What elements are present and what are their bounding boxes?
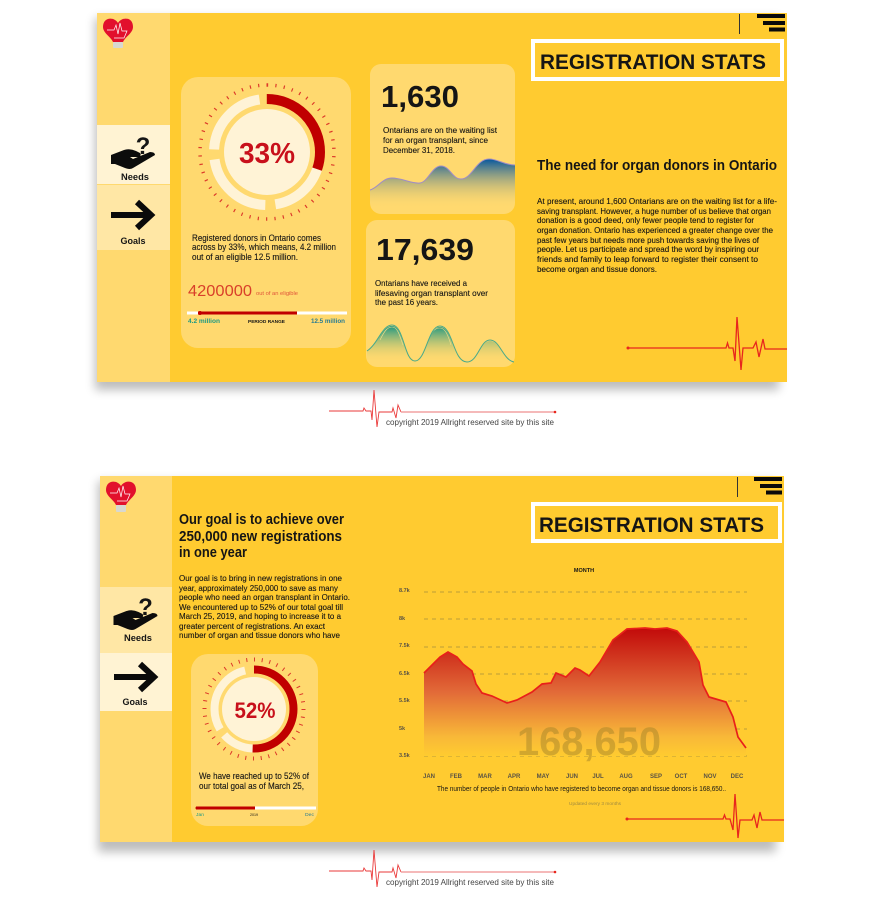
text: donors description: out of an eligible 12.5 million.	[192, 252, 298, 262]
chart: waiting list area	[370, 159, 515, 212]
text: waiting list: Ontarians are on the waiting list	[383, 125, 498, 135]
nav: needs: Needs	[124, 633, 152, 644]
text: goal paragraph: March 25, 2019, and hoping to increase it to a	[179, 611, 341, 621]
text: need paragraph: people. Let us participate and spread the word by inspiring our	[537, 244, 759, 254]
figure: 4200000	[188, 283, 298, 300]
range slider: Dec	[305, 812, 315, 817]
text: transplants	[375, 278, 488, 307]
range slider: Jan	[196, 812, 205, 817]
text: need paragraph: donation is a good deed, only fewer people tend to register for	[537, 215, 754, 225]
text: transplants: lifesaving organ transplant over	[375, 288, 488, 298]
text: goal paragraph: number of organ and tissue donors who have	[179, 630, 340, 640]
panel: needs	[95, 13, 787, 390]
month labels: JUN	[566, 774, 578, 780]
panel: transplants card: 17,639	[376, 232, 474, 267]
month labels: MAY	[537, 774, 549, 780]
text: waiting list: for an organ transplant, since	[383, 135, 488, 145]
heartbeat line	[626, 317, 787, 370]
panel: transplants card	[366, 220, 515, 367]
total: 168,650: 168,650	[517, 720, 661, 764]
nav: goals: Goals	[122, 697, 148, 708]
text: goal paragraph: year, approximately 250,000 to save as many	[179, 583, 339, 593]
area chart: monthly registrations: MONTH	[574, 568, 594, 574]
area	[424, 628, 746, 756]
y axis labels and grid	[399, 588, 747, 759]
gauge: 33%: 33%	[239, 138, 295, 170]
gauge: 33%	[200, 85, 334, 219]
range slider: 4.2 million	[188, 318, 220, 325]
text: reached: We have reached up to 52% of	[199, 771, 309, 781]
logo: heart bulb	[103, 19, 133, 48]
logo: heart bulb	[106, 482, 136, 512]
nav: goals	[97, 185, 170, 250]
text: goal paragraph: greater percent of registrations. An exact	[179, 621, 326, 631]
text: reached	[199, 771, 309, 791]
title box: REGISTRATION STATS	[540, 51, 766, 74]
text: need paragraph: friends and family to leap forward to register their consent to	[537, 254, 758, 264]
y axis labels and grid: 6.5k	[399, 671, 411, 677]
text: need paragraph	[537, 196, 777, 274]
text: need paragraph: organ donation. Ontario has experienced a greater change over the	[537, 225, 773, 235]
month labels: FEB	[450, 774, 463, 780]
text: need paragraph: At present, around 1,600 Ontarians are on the waiting list for a life-	[537, 196, 777, 206]
text: goal paragraph	[179, 573, 350, 640]
heading: goal: Our goal is to achieve over	[179, 512, 344, 528]
range slider: 2019	[250, 812, 259, 817]
footer: copyright 1: copyright 2019 Allright reserved site by this site	[386, 417, 554, 427]
area chart: monthly registrations	[399, 568, 747, 780]
caption: The number of people in Ontario who have registered to become organ and tissue donors is 168,650..	[437, 786, 726, 793]
icon: arrow	[114, 664, 154, 690]
nav: needs	[97, 125, 170, 184]
icon: hand with question mark: ?	[138, 594, 153, 621]
nav: needs: Needs	[121, 172, 149, 183]
text: transplants: the past 16 years.	[375, 297, 438, 307]
text: need paragraph: past few years but needs more push towards saving the lives of	[537, 235, 760, 245]
title box: REGISTRATION STATS	[539, 514, 764, 537]
footer: copyright 2: copyright 2019 Allright reserved site by this site	[386, 877, 554, 887]
figure: 4200000: 4200000	[188, 283, 252, 300]
text: goal paragraph: We encountered up to 52% of our total goal till	[179, 602, 343, 612]
y axis labels and grid: 8.7k	[399, 588, 411, 594]
chart: transplants area	[367, 325, 514, 367]
month labels: JAN	[423, 774, 435, 780]
text: donors description: across by 33%, which means, 4.2 million	[192, 242, 336, 252]
icon: menu	[737, 477, 782, 497]
title box	[533, 504, 780, 541]
heading: goal: in one year	[179, 545, 247, 561]
icon: menu	[739, 14, 785, 34]
heading: need for donors: The need for organ donors in Ontario	[537, 157, 777, 174]
panel: waiting list card	[370, 64, 515, 214]
text: reached: our total goal as of March 25,	[199, 781, 304, 791]
nav: goals	[100, 653, 172, 711]
month labels: AUG	[619, 774, 633, 780]
panel: registered donors card	[181, 77, 351, 348]
panel: waiting list card: 1,630	[381, 79, 459, 114]
text: goal paragraph: people who need an organ transplant in Ontario.	[179, 592, 350, 602]
nav: goals: Goals	[120, 236, 146, 247]
figure: 4200000: out of an eligible	[256, 291, 298, 297]
panel: 52% card	[191, 654, 318, 826]
month labels	[423, 774, 744, 780]
text: transplants: Ontarians have received a	[375, 278, 467, 288]
month labels: DEC	[731, 774, 744, 780]
panel: goals	[98, 476, 784, 852]
y axis labels and grid: 5k	[399, 726, 406, 732]
y axis labels and grid: 8k	[399, 616, 406, 622]
gauge: 52%: 52%	[234, 698, 276, 723]
range slider	[196, 806, 316, 817]
heartbeat line	[626, 794, 784, 838]
text: waiting list: December 31, 2018.	[383, 145, 455, 155]
text: donors description	[192, 233, 336, 262]
y axis labels and grid: 5.5k	[399, 698, 411, 704]
text: need paragraph: saving transplant. However, a huge number of us believe that organ	[537, 206, 771, 216]
icon: hand with question mark: ?	[136, 133, 150, 160]
text: donors description: Registered donors in Ontario comes	[192, 233, 321, 243]
title box	[533, 41, 782, 79]
heading: goal: 250,000 new registrations	[179, 529, 342, 545]
line	[424, 628, 746, 748]
range slider: PERIOD RANGE	[248, 319, 285, 324]
month labels: JUL	[592, 774, 604, 780]
note: Updated every 3 months	[569, 801, 622, 807]
month labels: SEP	[650, 774, 662, 780]
footer: copyright 2	[329, 850, 556, 887]
range slider	[187, 311, 347, 325]
y axis labels and grid: 7.5k	[399, 643, 411, 649]
icon: arrow	[111, 202, 151, 228]
nav: needs	[100, 587, 172, 653]
month labels: MAR	[478, 774, 492, 780]
month labels: APR	[508, 774, 521, 780]
footer: copyright 1	[329, 390, 556, 427]
y axis labels and grid: 3.5k	[399, 753, 411, 759]
month labels: NOV	[703, 774, 717, 780]
month labels: OCT	[675, 774, 688, 780]
text: waiting list	[383, 125, 498, 155]
heading: goal	[179, 512, 344, 561]
text: goal paragraph: Our goal is to bring in new registrations in one	[179, 573, 342, 583]
text: need paragraph: become organ and tissue donors.	[537, 264, 657, 274]
range slider: 12.5 million	[311, 318, 345, 325]
gauge: 52%	[204, 660, 304, 758]
